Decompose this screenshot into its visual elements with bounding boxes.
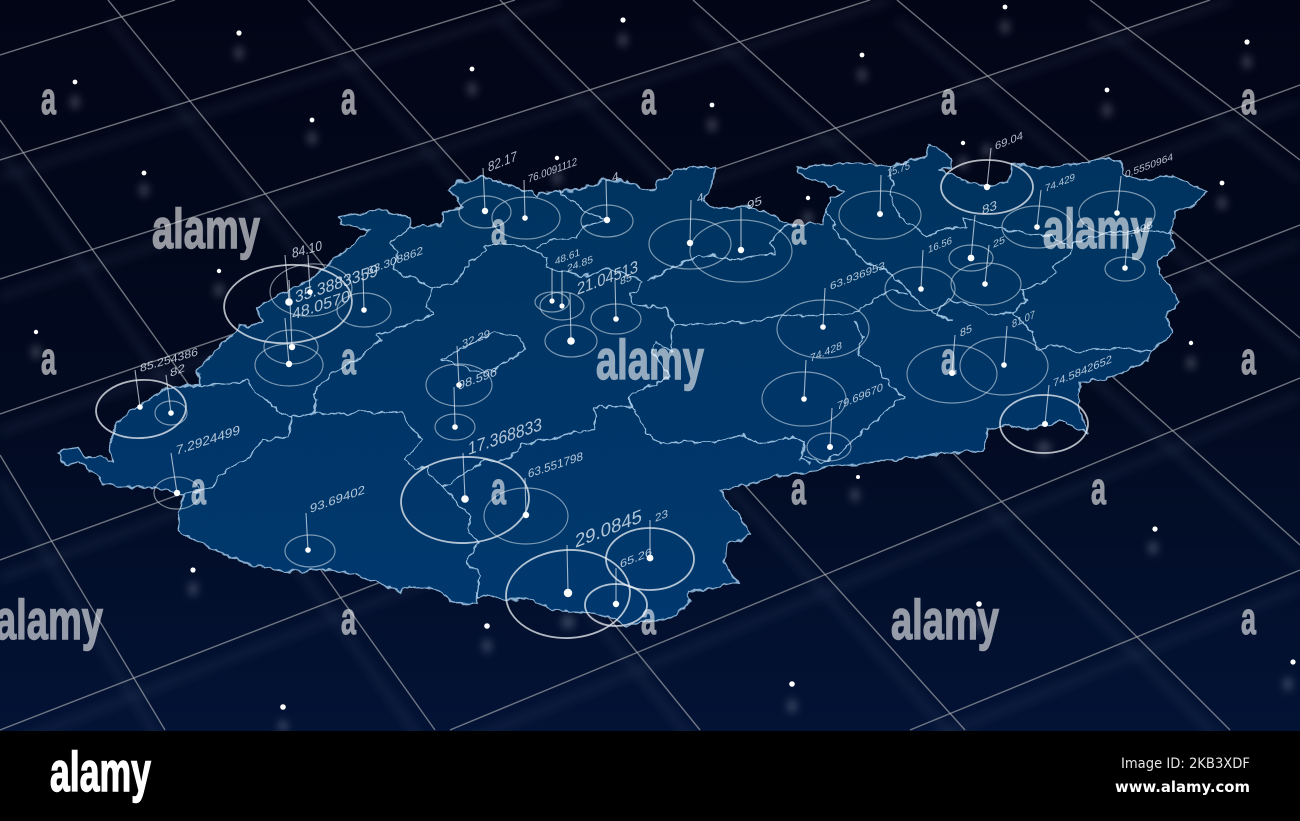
marker: 25: 25 xyxy=(993,235,1005,251)
marker: 48.61 xyxy=(535,247,580,312)
marker: 85 centre: 85 xyxy=(620,272,632,288)
marker: 79.69670: 79.69670 xyxy=(837,382,883,413)
marker: 74.429: 74.429 xyxy=(1045,172,1075,195)
marker: 4 centre xyxy=(649,190,731,269)
marker: 24.85 xyxy=(540,254,593,320)
marker: 82.17 xyxy=(459,149,517,228)
watermark: repeated letter a: a xyxy=(641,593,657,644)
marker: 0.5550964: 0.5550964 xyxy=(1125,152,1173,181)
footer bar xyxy=(0,731,1300,821)
map: outer coast xyxy=(58,145,1207,627)
marker: 4 north xyxy=(581,169,633,237)
map: landmass and region borders xyxy=(58,145,1207,627)
watermark: repeated letter a: a xyxy=(1241,593,1257,644)
marker: 65.26 xyxy=(585,547,652,626)
marker: 82 xyxy=(155,362,187,425)
watermark: repeated letter a: a xyxy=(341,593,357,644)
marker: 23 xyxy=(606,508,694,590)
marker: 4 centre: 4 xyxy=(697,190,704,206)
marker: 74.429 xyxy=(1002,172,1075,248)
marker: 63.551798: 63.551798 xyxy=(528,449,583,481)
marker: 85 east xyxy=(907,323,997,403)
marker: 81.07: 81.07 xyxy=(1012,309,1035,331)
marker: 82.17: 82.17 xyxy=(488,149,517,176)
marker: unlabelled lower-left ring xyxy=(255,318,323,386)
watermark: repeated letter a: a xyxy=(1241,333,1257,384)
marker: 48.61: 48.61 xyxy=(555,247,580,268)
marker: 85 east: 85 xyxy=(960,323,972,340)
marker: 25 xyxy=(951,235,1021,305)
watermarks xyxy=(0,73,1257,651)
marker: 63.308862: 63.308862 xyxy=(367,245,423,278)
watermark: repeated letter a: a xyxy=(791,203,807,254)
marker: 76.0091112 xyxy=(492,156,577,239)
watermark: repeated letter a: a xyxy=(1241,73,1257,124)
marker: 15.75 xyxy=(839,160,921,239)
marker: 7.2924499 xyxy=(154,422,240,509)
marker: 63.936953 xyxy=(777,260,885,358)
marker: 85.254386: 85.254386 xyxy=(140,346,198,375)
marker: 74.428 xyxy=(762,340,846,426)
watermark: alamy top right: alamy xyxy=(1043,197,1152,260)
data markers xyxy=(94,130,1173,641)
marker: 16.56: 16.56 xyxy=(928,236,952,256)
marker: .498 xyxy=(1105,220,1153,281)
marker: 74.428: 74.428 xyxy=(810,340,842,365)
marker: 74.5842652 xyxy=(1000,354,1112,453)
marker: 29.0845 xyxy=(504,505,642,641)
marker: 79.69670 xyxy=(807,382,883,461)
marker: 7.2924499: 7.2924499 xyxy=(176,422,240,458)
marker: 63.551798 xyxy=(484,449,583,544)
watermark: alamy centre: alamy xyxy=(596,328,704,391)
marker: 95 xyxy=(690,193,792,282)
marker: 81.07 xyxy=(960,309,1048,395)
marker: 93.69402: 93.69402 xyxy=(310,482,365,516)
watermark: repeated letter a: a xyxy=(491,203,507,254)
marker: 32.29 xyxy=(426,328,492,406)
watermark: repeated letter a: a xyxy=(791,463,807,514)
marker: 35.3883359: 35.3883359 xyxy=(295,260,378,307)
marker: 29.0845: 29.0845 xyxy=(575,505,642,553)
watermark: repeated letter a: a xyxy=(341,73,357,124)
marker: 82: 82 xyxy=(170,362,185,380)
watermark: repeated letter a: a xyxy=(41,73,57,124)
marker: 69.04 xyxy=(941,130,1033,214)
footer image id: Image ID: 2KB3XDF xyxy=(1121,756,1250,772)
footer website: www.alamy.com xyxy=(1115,778,1250,796)
marker: 17.368833 xyxy=(399,413,542,546)
marker: 76.0091112: 76.0091112 xyxy=(528,156,577,186)
watermark: repeated letter a: a xyxy=(941,73,957,124)
map: internal region borders xyxy=(183,167,1173,597)
marker: 23: 23 xyxy=(655,508,668,525)
marker: 84.10: 84.10 xyxy=(292,238,322,262)
marker: .498: .498 xyxy=(1130,220,1153,240)
watermark: alamy bottom right: alamy xyxy=(891,588,999,651)
marker: 85.254386 xyxy=(94,346,198,441)
marker: 98.596 xyxy=(435,365,497,440)
marker: 85 centre xyxy=(591,272,641,334)
marker: 84.10 xyxy=(268,238,354,319)
watermark: repeated letter a: a xyxy=(191,463,207,514)
marker: 48.0570: 48.0570 xyxy=(292,287,350,324)
watermark: repeated letter a: a xyxy=(641,73,657,124)
marker: 21.04513 xyxy=(545,256,638,357)
footer logo: alamy: alamy xyxy=(50,740,151,803)
marker: 15.75: 15.75 xyxy=(887,160,910,180)
watermark: alamy top left: alamy xyxy=(152,197,260,260)
marker: 98.596: 98.596 xyxy=(458,365,497,393)
marker: 95: 95 xyxy=(747,193,762,213)
marker: 83 xyxy=(949,197,997,271)
marker: 65.26: 65.26 xyxy=(620,547,652,571)
marker: 16.56 xyxy=(885,236,955,311)
watermark: repeated letter a: a xyxy=(341,333,357,384)
watermark: repeated letter a: a xyxy=(941,333,957,384)
marker: 63.936953: 63.936953 xyxy=(830,260,885,293)
marker: 0.5550964 xyxy=(1079,152,1173,235)
marker: 4 north: 4 xyxy=(612,169,619,185)
marker: 83: 83 xyxy=(982,197,997,218)
watermark: repeated letter a: a xyxy=(1091,463,1107,514)
marker: 93.69402 xyxy=(285,482,365,567)
marker: 74.5842652: 74.5842652 xyxy=(1053,354,1112,390)
marker: 32.29: 32.29 xyxy=(462,328,490,351)
marker: 69.04: 69.04 xyxy=(995,130,1024,153)
marker: 48.0570 xyxy=(264,280,350,364)
marker: 17.368833: 17.368833 xyxy=(468,413,542,459)
watermark: repeated letter a: a xyxy=(41,333,57,384)
watermark: repeated letter a xyxy=(41,73,1257,644)
marker: 24.85: 24.85 xyxy=(567,254,593,275)
marker: 21.04513: 21.04513 xyxy=(577,256,638,299)
marker: 35.3883359 xyxy=(221,255,378,347)
marker: 63.308862 xyxy=(337,245,423,327)
watermark: repeated letter a: a xyxy=(491,463,507,514)
